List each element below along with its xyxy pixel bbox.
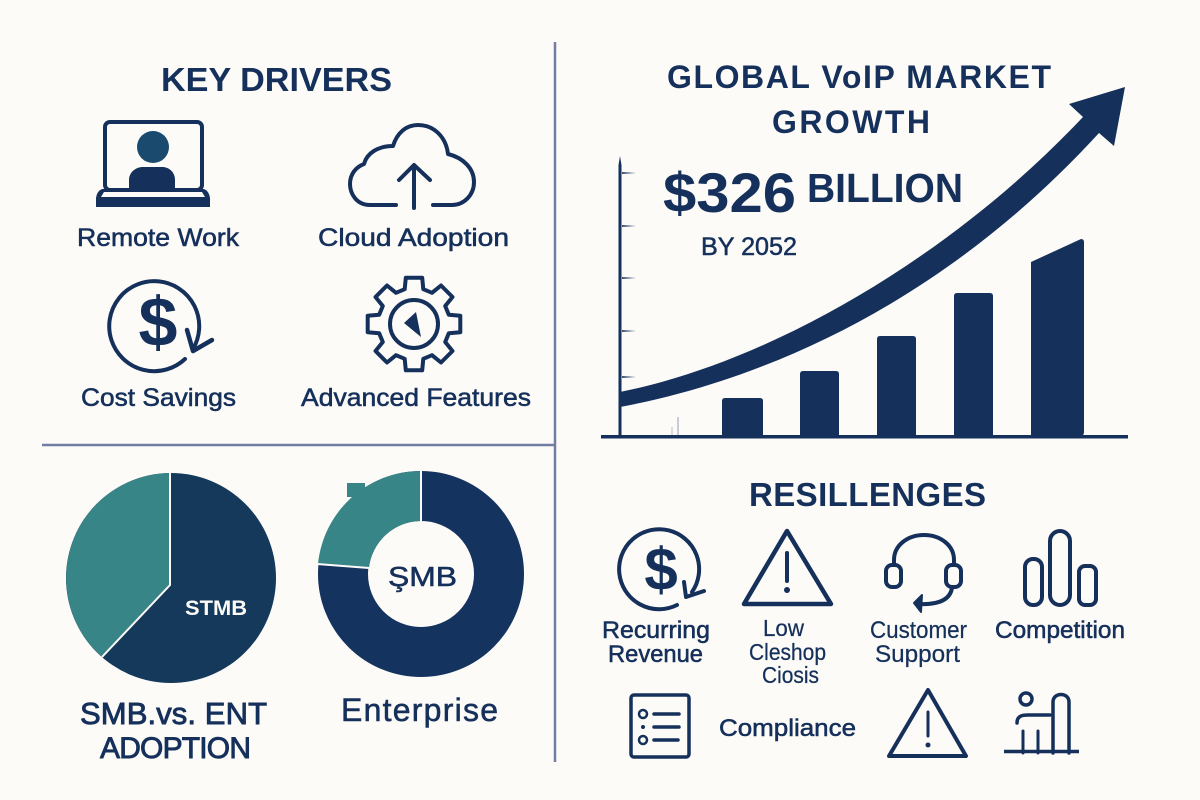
stat: market value bbox=[663, 161, 963, 224]
label: recurring revenue: Revenue bbox=[608, 641, 703, 668]
heading: resillenges: RESILLENGES bbox=[749, 476, 986, 513]
label: smb vs ent adoption: ADOPTION bbox=[100, 732, 251, 765]
label: enterprise: Enterprise bbox=[341, 692, 498, 728]
label: cloud adoption: Cloud Adoption bbox=[318, 224, 509, 252]
label: recurring revenue: Recurring bbox=[602, 617, 710, 644]
label: low cleshop ciosis: Ciosis bbox=[762, 662, 819, 688]
icon: cloud upload bbox=[350, 125, 474, 208]
icon: person and bars bbox=[1004, 693, 1079, 753]
label: customer support: Customer bbox=[870, 617, 967, 644]
label: smb vs ent adoption bbox=[80, 696, 267, 765]
icon: bars bbox=[1025, 531, 1096, 605]
heading: global voip market growth: GROWTH bbox=[772, 104, 930, 140]
panel: smb vs enterprise adoption bbox=[66, 470, 499, 765]
label: low cleshop ciosis: Cleshop bbox=[749, 639, 826, 665]
panel: resillenges bbox=[602, 476, 1125, 757]
icon: laptop with person bbox=[96, 122, 210, 207]
label: by 2052: BY 2052 bbox=[701, 233, 797, 261]
heading: global voip market growth: GLOBAL VoIP MARKET bbox=[667, 59, 1051, 95]
label: low cleshop ciosis bbox=[749, 615, 826, 688]
chart: donut bbox=[317, 470, 499, 652]
label: recurring revenue bbox=[602, 617, 710, 668]
label: advanced features: Advanced Features bbox=[301, 384, 531, 412]
chart: pie bbox=[66, 472, 276, 683]
label: customer support bbox=[870, 617, 967, 668]
label: remote work: Remote Work bbox=[77, 224, 240, 252]
panel: market growth bbox=[601, 59, 1128, 438]
label: low cleshop ciosis: Low bbox=[763, 615, 804, 641]
icon: headset bbox=[886, 535, 961, 612]
stat: market value: BILLION bbox=[807, 165, 963, 211]
label: customer support: Support bbox=[875, 641, 960, 668]
chart: donut: ŞMB bbox=[388, 561, 457, 592]
icon: gear bbox=[368, 278, 460, 370]
chart: pie: STMB bbox=[185, 597, 247, 620]
icon: cost savings dollar bbox=[109, 281, 212, 371]
chart: growth axes and bars bbox=[601, 156, 1128, 438]
icon: recurring revenue bbox=[619, 529, 704, 609]
label: cost savings: Cost Savings bbox=[81, 384, 236, 412]
label: competition: Competition bbox=[995, 617, 1125, 644]
icon: cost savings dollar: $ bbox=[139, 283, 177, 361]
panel: key drivers bbox=[77, 61, 531, 412]
heading: global voip market growth bbox=[667, 59, 1051, 140]
arrow: growth curve bbox=[620, 87, 1125, 407]
stat: market value: $326 bbox=[663, 161, 796, 224]
label: smb vs ent adoption: SMB.vs. ENT bbox=[80, 696, 267, 731]
icon: warning triangle bbox=[744, 531, 831, 604]
icon: checklist bbox=[631, 695, 689, 757]
icon: recurring revenue: $ bbox=[644, 536, 678, 603]
icon: warning triangle small bbox=[889, 690, 966, 756]
heading: key drivers: KEY DRIVERS bbox=[161, 61, 392, 98]
label: compliance: Compliance bbox=[719, 715, 856, 742]
